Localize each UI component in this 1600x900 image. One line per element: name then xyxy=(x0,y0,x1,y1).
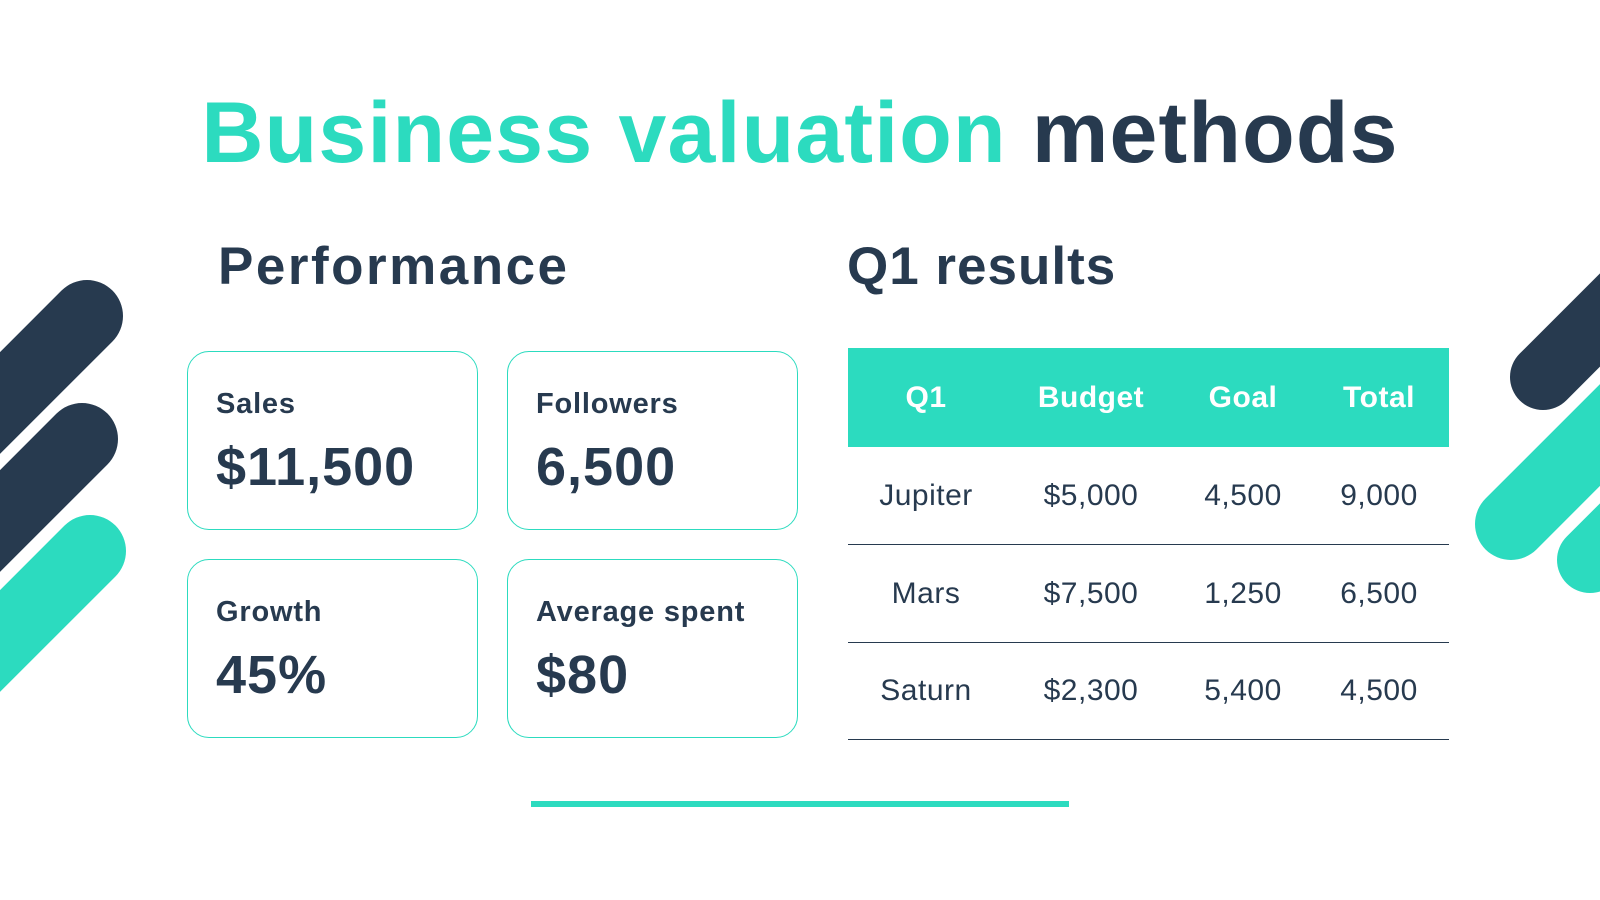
table header: Goal xyxy=(1209,381,1277,414)
card: sales xyxy=(187,351,478,530)
row: Mars: Mars xyxy=(892,577,960,610)
bottom accent line xyxy=(531,801,1069,807)
row: Saturn: 4,500 xyxy=(1340,674,1418,707)
table header: Total xyxy=(1343,381,1415,414)
table header xyxy=(848,348,1449,447)
row: Jupiter: 9,000 xyxy=(1340,479,1418,512)
card: average spent: Average spent xyxy=(536,596,745,628)
table header: Q1 xyxy=(905,381,947,414)
title: Business valuation methods xyxy=(201,85,1399,181)
row: Mars: $7,500 xyxy=(1044,577,1138,610)
row: Jupiter xyxy=(848,447,1449,545)
row: Saturn: Saturn xyxy=(880,674,972,707)
card: average spent: $80 xyxy=(536,645,629,705)
row: Jupiter: 4,500 xyxy=(1204,479,1282,512)
table header: Budget xyxy=(1038,381,1144,414)
row: Mars: 1,250 xyxy=(1204,577,1282,610)
card: sales: Sales xyxy=(216,388,296,420)
row: Jupiter: Jupiter xyxy=(879,479,973,512)
card: growth: Growth xyxy=(216,596,322,628)
card: followers: Followers xyxy=(536,388,679,420)
row: Saturn xyxy=(848,642,1449,740)
heading: Q1 results: Q1 results xyxy=(847,237,1116,296)
heading: Performance: Performance xyxy=(218,237,570,296)
card: followers: 6,500 xyxy=(536,437,676,497)
card: sales: $11,500 xyxy=(216,437,415,497)
row: Mars xyxy=(848,545,1449,643)
row: Saturn: $2,300 xyxy=(1044,674,1138,707)
row: Jupiter: $5,000 xyxy=(1044,479,1138,512)
row: Saturn: 5,400 xyxy=(1204,674,1282,707)
card: growth: 45% xyxy=(216,645,327,705)
row: Mars: 6,500 xyxy=(1340,577,1418,610)
card: growth xyxy=(187,559,478,738)
card: followers xyxy=(507,351,798,530)
card: average spent xyxy=(507,559,798,738)
